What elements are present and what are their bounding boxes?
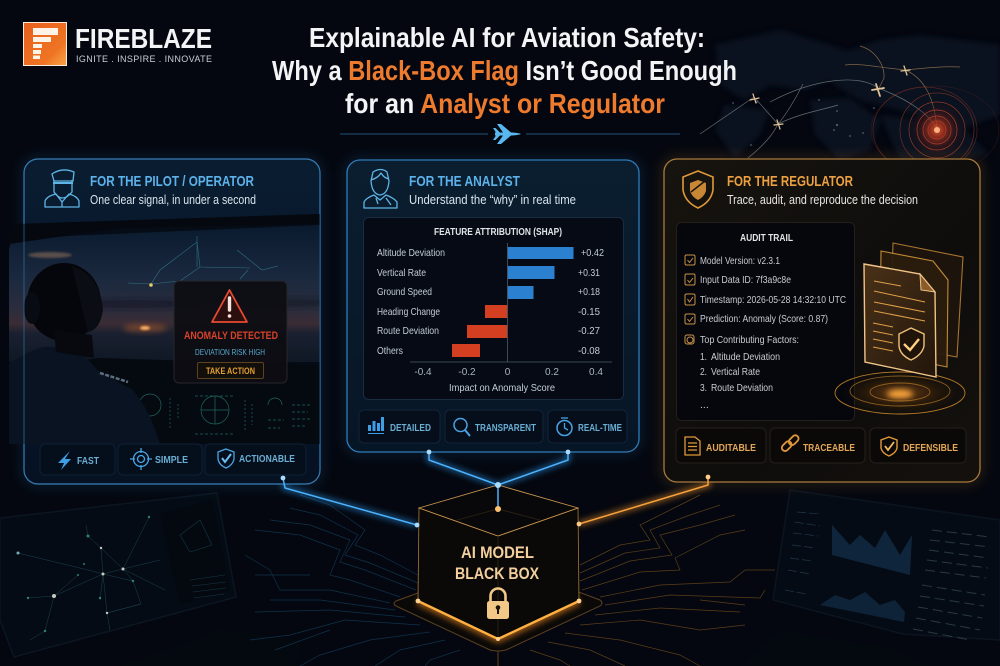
box label [455,543,540,583]
audit records: Input Data ID: 7f3a9c8e [700,274,791,286]
logo mark [24,22,66,66]
icon: pilot [45,170,79,207]
bar values: +0.42 [581,247,604,259]
chip: detailed [359,410,440,443]
panel heading: FOR THE PILOT / OPERATOR [90,173,254,190]
cockpit instruments [139,394,310,434]
chip: transparent [445,410,543,443]
box label: BLACK BOX [455,564,540,583]
alert box [174,281,287,383]
chip: real-time: REAL-TIME [578,422,622,434]
bar values: -0.27 [578,325,600,337]
background: world map with flight routes [700,30,1000,174]
audit records: Model Version: v2.3.1 [700,255,780,267]
icon: analyst [364,170,397,208]
background: radar monitor lower left [0,493,300,666]
bar values: +0.31 [578,267,600,279]
panel subheading: Trace, audit, and reproduce the decision [727,192,918,207]
audit trail box [676,222,854,420]
chip: defensible: DEFENSIBLE [903,442,958,454]
bar values: -0.15 [578,306,600,318]
chip: traceable: TRACEABLE [803,442,855,454]
axis ticks: 0 [505,367,511,378]
chip: auditable [676,428,766,463]
audit records: ... [700,399,709,411]
feature labels: Route Deviation [377,325,439,337]
chip: fast [40,444,115,475]
title: for an Analyst or Regulator [345,88,665,119]
audit records: Altitude Deviation [711,351,780,363]
feature labels: Altitude Deviation [377,247,445,259]
audit records: Route Deviation [711,382,773,394]
box label: AI MODEL [461,543,534,562]
panel: analyst [347,160,639,452]
alert detail: DEVIATION RISK HIGH [195,348,265,357]
panel heading: FOR THE REGULATOR [727,173,853,190]
audit records: 1. [700,351,707,363]
chip: simple: SIMPLE [155,454,188,466]
title: Explainable AI for Aviation Safety: [309,22,705,53]
chip: detailed: DETAILED [390,422,431,434]
connectors glow [283,452,708,525]
bars [452,247,574,357]
bar values [578,247,604,357]
logo wordmark: FIREBLAZE [75,23,212,54]
icon: warning triangle [212,290,247,322]
chart title: FEATURE ATTRIBUTION (SHAP) [434,227,562,238]
audit check icons [685,255,695,344]
cube glow [418,601,579,639]
feature labels: Vertical Rate [377,267,426,279]
bar values: +0.18 [578,286,600,298]
axis ticks: -0.2 [458,367,476,378]
background: analytics laptop lower right [740,490,1000,666]
panel subheading: Understand the “why” in real time [409,192,576,207]
cube base [394,585,602,651]
illustration: document stack on glowing pad [835,243,965,414]
panel heading: FOR THE ANALYST [409,173,520,190]
axis ticks: -0.4 [414,367,432,378]
audit records: 3. [700,382,707,394]
chip: actionable: ACTIONABLE [239,453,295,465]
icon: map aircraft [750,66,910,129]
connector lines and nodes [281,450,710,641]
bar chart: feature attribution [364,218,624,400]
chip: defensible [870,428,966,463]
chip: fast: FAST [77,455,99,467]
audit records: Prediction: Anomaly (Score: 0.87) [700,313,828,325]
pilot silhouette [0,263,160,444]
logo tagline: IGNITE . INSPIRE . INNOVATE [76,54,212,64]
axis title: Impact on Anomaly Score [449,382,555,394]
chip: actionable [205,444,306,475]
audit records [700,255,846,411]
panel: regulator [664,159,980,482]
feature labels [377,247,445,357]
axis ticks [414,367,603,378]
chip: transparent: TRANSPARENT [475,422,536,434]
feature labels: Ground Speed [377,286,432,298]
cube bottom edge [418,601,579,639]
title [272,22,737,119]
title: Why a Black-Box Flag Isn’t Good Enough [272,55,737,86]
panel glows [24,159,980,484]
icon: radar target [871,86,999,174]
chip: auditable: AUDITABLE [706,442,756,454]
audit records: 2. [700,366,707,378]
alert headline: ANOMALY DETECTED [184,330,278,342]
chip: simple [118,444,202,475]
panel subheading: One clear signal, in under a second [90,192,256,207]
audit records: Timestamp: 2026-05-28 14:32:10 UTC [700,294,846,306]
axis ticks: 0.2 [545,367,559,378]
bar values: -0.08 [578,345,600,357]
chip: real-time [548,410,627,443]
feature labels: Heading Change [377,306,440,318]
audit heading: AUDIT TRAIL [740,232,793,244]
panel: pilot / operator [0,159,335,484]
background: circuit traces [245,495,775,666]
HUD flight lines [128,236,278,284]
audit records: Top Contributing Factors: [700,334,799,346]
cube top [419,485,578,536]
icon: shield [683,171,713,208]
take action button: TAKE ACTION [206,366,255,376]
axis [410,243,612,362]
black box cube [394,485,602,651]
panel border over scene [24,159,320,484]
title divider with plane icon [340,124,680,144]
cockpit scene [9,214,320,444]
icon: padlock [487,588,509,619]
cube body [418,508,579,639]
feature labels: Others [377,345,403,357]
axis ticks: 0.4 [589,367,603,378]
logo [24,22,212,66]
audit records: Vertical Rate [711,366,760,378]
chip: traceable [770,428,865,463]
